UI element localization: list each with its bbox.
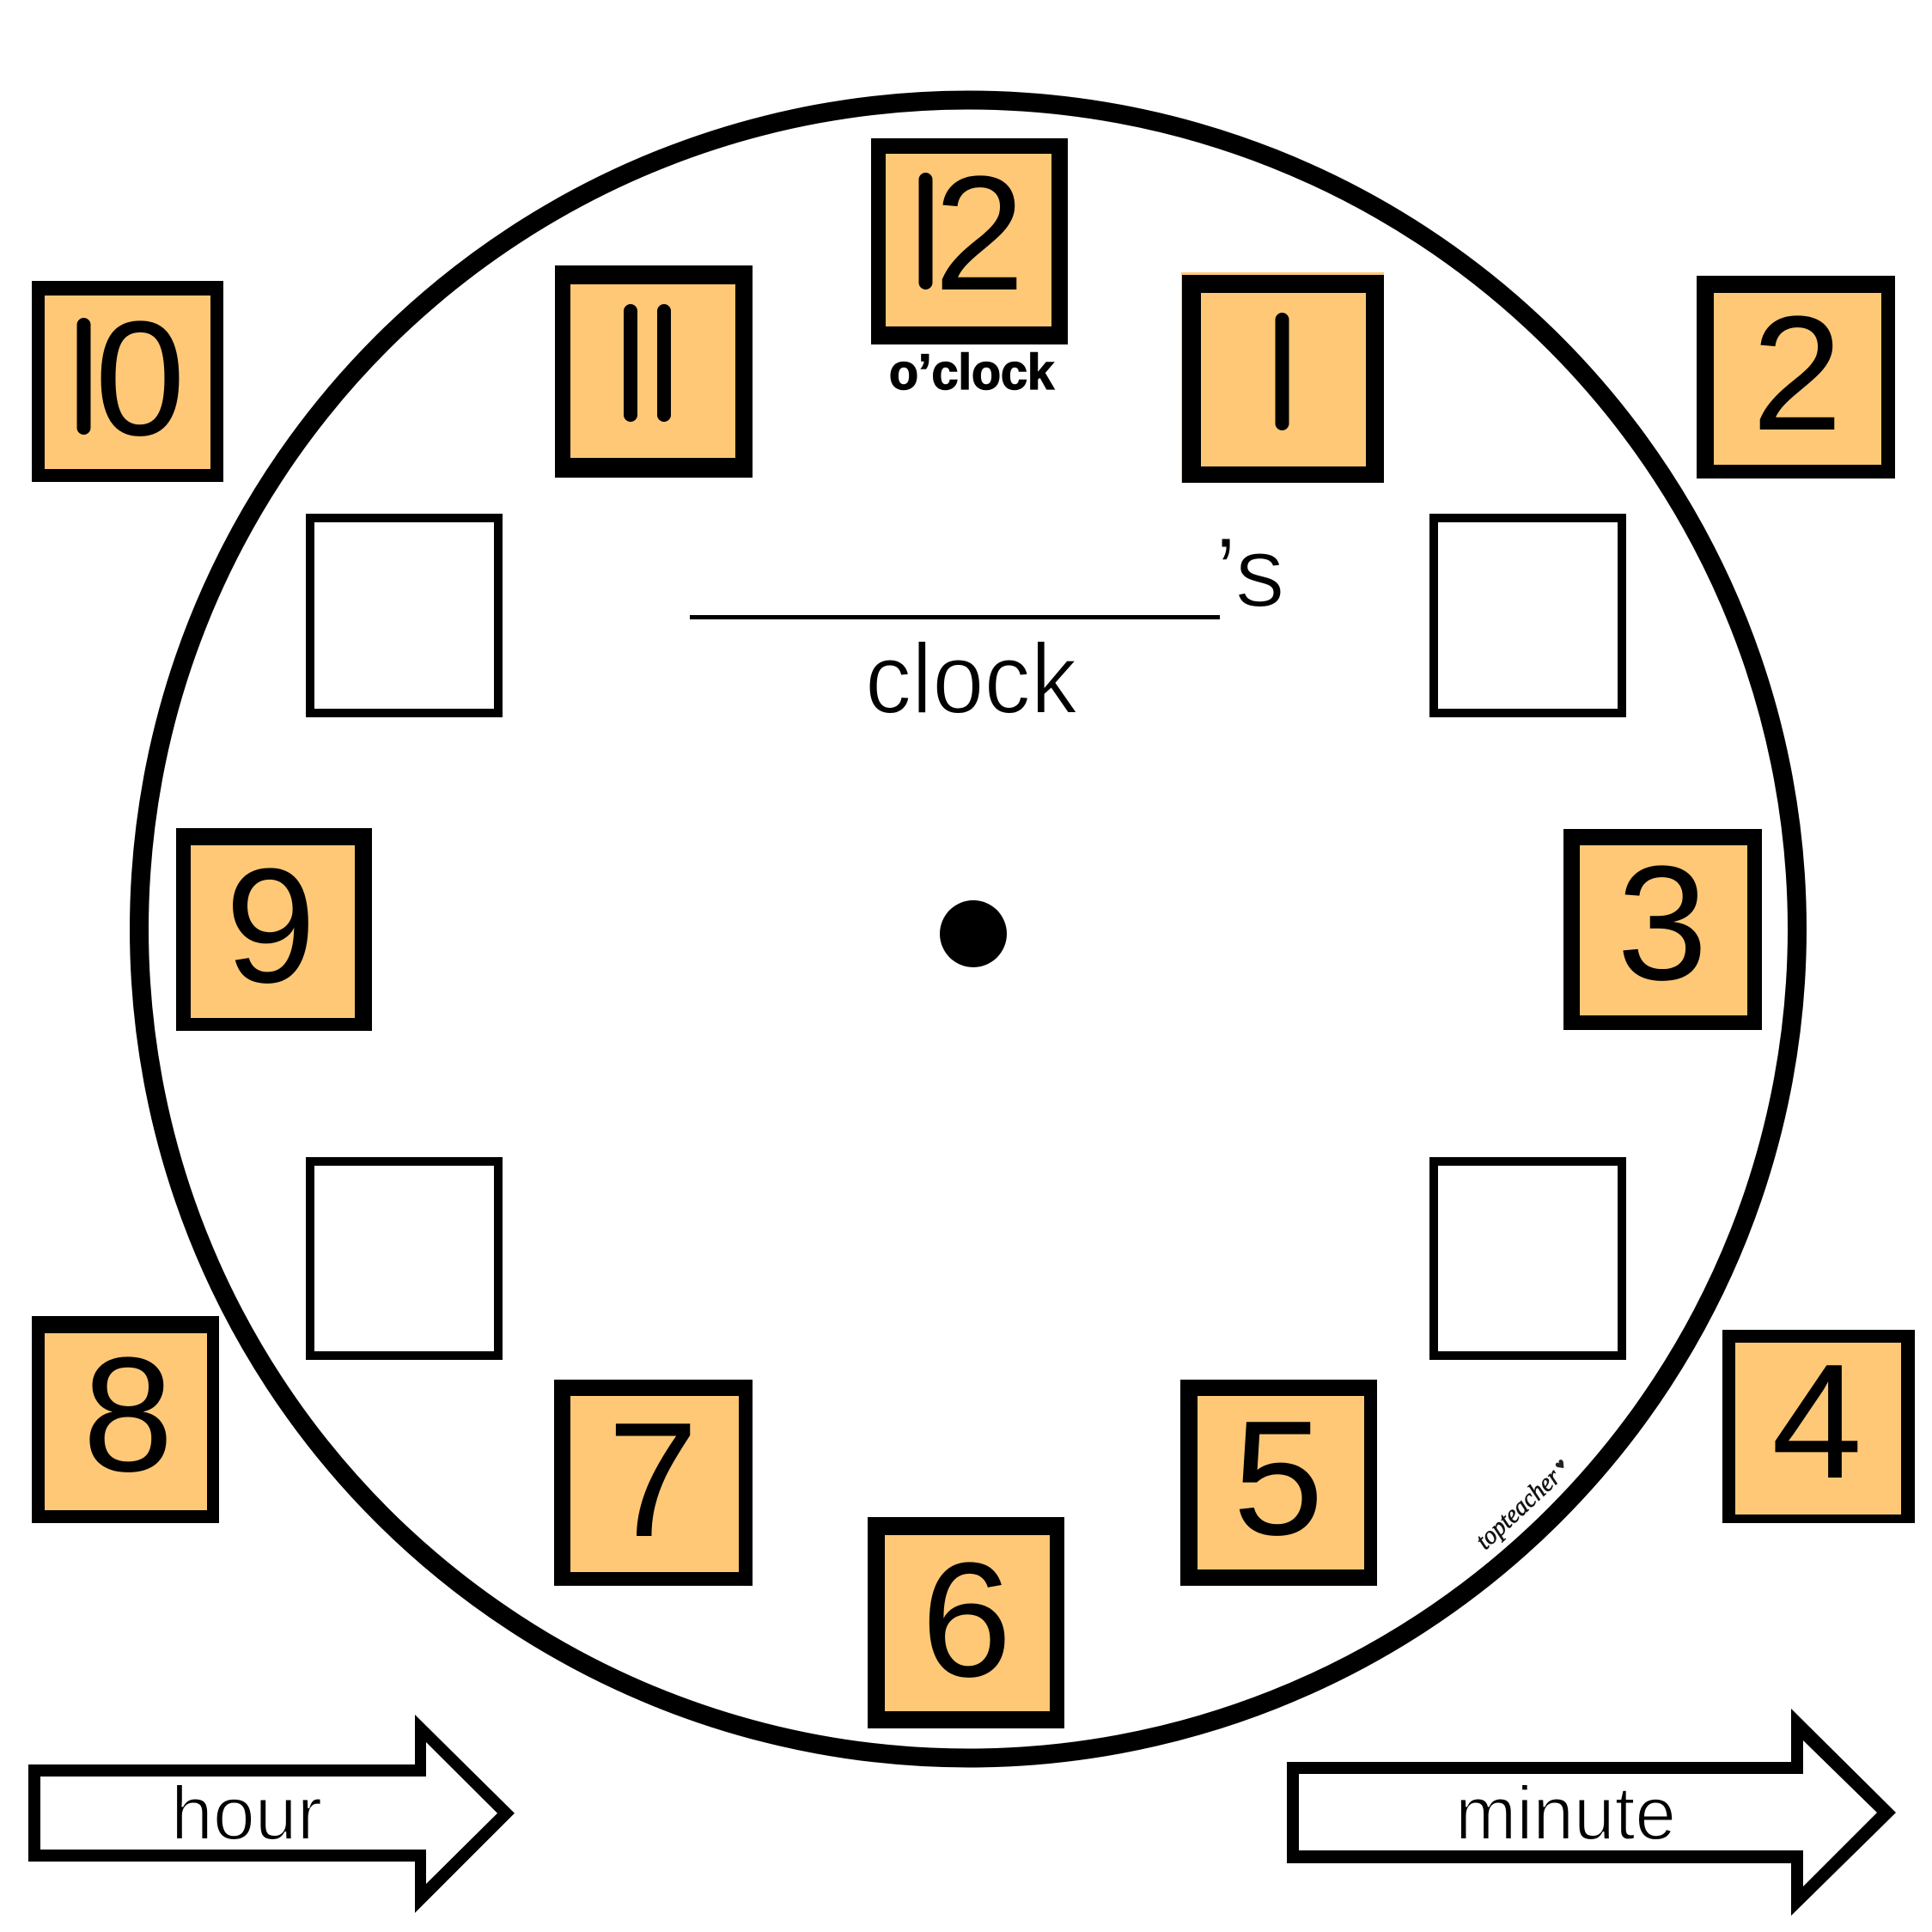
number tile 3 — [1563, 829, 1762, 1030]
number tile 11 — [555, 254, 753, 478]
minute hand arrow — [1287, 1709, 1896, 1916]
number tile 6 — [868, 1517, 1064, 1728]
number tile 5: 5 — [1233, 1387, 1324, 1569]
number tile 9 — [176, 828, 372, 1031]
number tile 10: 0 — [94, 288, 186, 470]
number tile 7 — [554, 1380, 753, 1586]
hour hand arrow — [28, 1715, 515, 1913]
o'clock label: o’clock — [889, 344, 1055, 400]
number tile 8: 8 — [82, 1324, 174, 1506]
number tile 1 — [1181, 263, 1384, 483]
number tile 12: 2 — [934, 143, 1025, 325]
empty box top left — [310, 518, 498, 713]
number tile 5 — [1180, 1380, 1377, 1586]
number tile 2 — [1697, 276, 1895, 478]
brand mark: topteacher — [1470, 1463, 1566, 1555]
number tile 7: 7 — [607, 1389, 698, 1571]
number tile 10: 1 — [29, 267, 131, 474]
number tile 10 — [29, 267, 223, 482]
number tile 11: 1 — [576, 254, 679, 461]
empty box bottom right — [1434, 1161, 1622, 1356]
number tile 9: 9 — [225, 835, 316, 1017]
empty box bottom left — [310, 1161, 498, 1356]
number tile 1: 1 — [1228, 263, 1330, 470]
number tile 12: 1 — [871, 122, 973, 329]
clock label: clock — [865, 623, 1078, 734]
number tile 6: 6 — [921, 1529, 1012, 1711]
number tile 2: 2 — [1752, 283, 1843, 465]
number tile 12 — [871, 122, 1068, 344]
minute hand arrow: minute — [1455, 1770, 1676, 1856]
number tile 3: 3 — [1617, 832, 1708, 1015]
brand mark: ♥ — [1553, 1457, 1570, 1474]
empty box top right — [1434, 518, 1622, 713]
possessive s: ’s — [1215, 516, 1285, 628]
clock face — [139, 100, 1797, 1758]
hour hand arrow: hour — [171, 1770, 322, 1856]
number tile 4: 4 — [1771, 1331, 1862, 1513]
name line — [690, 615, 1220, 619]
center dot — [940, 900, 1007, 967]
number tile 11: 1 — [609, 254, 712, 461]
number tile 4 — [1722, 1330, 1915, 1523]
number tile 8 — [32, 1316, 219, 1523]
